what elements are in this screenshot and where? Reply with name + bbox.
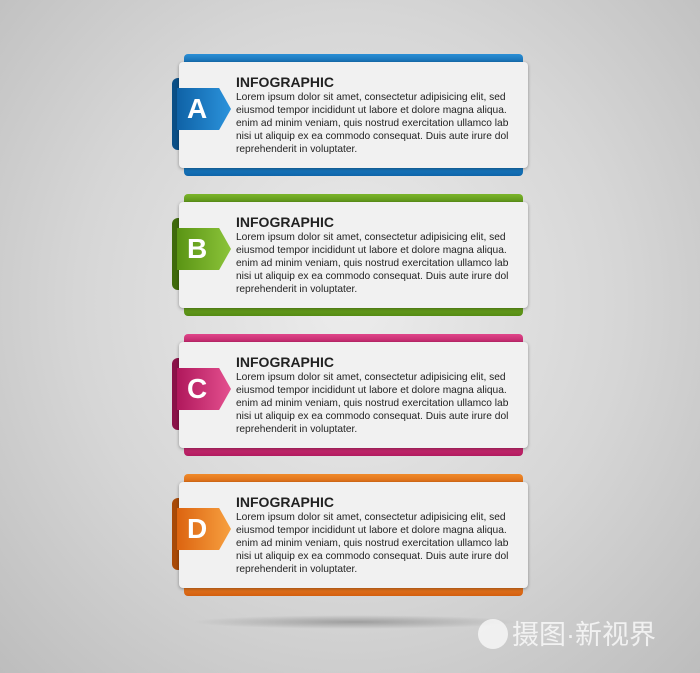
text: reprehenderit in voluptater. — [236, 284, 357, 295]
text: eiusmod tempor incididunt ut labore et dolore magna aliqua. — [236, 245, 507, 256]
text: enim ad minim veniam, quis nostrud exercitation ullamco lab — [236, 398, 508, 409]
text: enim ad minim veniam, quis nostrud exercitation ullamco lab — [236, 538, 508, 549]
heading: INFOGRAPHIC — [236, 74, 334, 90]
text: eiusmod tempor incididunt ut labore et dolore magna aliqua. — [236, 385, 507, 396]
tag: A — [177, 88, 231, 130]
text: Lorem ipsum dolor sit amet, consectetur adipisicing elit, sed — [236, 232, 506, 243]
tag: C — [177, 368, 231, 410]
text: Lorem ipsum dolor sit amet, consectetur adipisicing elit, sed — [236, 372, 506, 383]
text — [236, 92, 508, 155]
text: Lorem ipsum dolor sit amet, consectetur adipisicing elit, sed — [236, 92, 506, 103]
text — [236, 372, 508, 435]
heading: INFOGRAPHIC — [236, 214, 334, 230]
text: nisi ut aliquip ex ea commodo consequat. Duis aute irure dol — [236, 411, 508, 422]
tag: D: D — [187, 513, 207, 544]
text: reprehenderit in voluptater. — [236, 144, 357, 155]
text: eiusmod tempor incididunt ut labore et dolore magna aliqua. — [236, 105, 507, 116]
text — [236, 232, 508, 295]
tag: D — [177, 508, 231, 550]
text: nisi ut aliquip ex ea commodo consequat. Duis aute irure dol — [236, 271, 508, 282]
text: reprehenderit in voluptater. — [236, 564, 357, 575]
text — [236, 512, 508, 575]
heading: INFOGRAPHIC — [236, 494, 334, 510]
tag: A: A — [187, 93, 207, 124]
heading: INFOGRAPHIC — [236, 354, 334, 370]
panel: C — [172, 334, 530, 456]
watermark: 摄图·新视界 — [512, 620, 656, 650]
panel: A — [172, 54, 530, 176]
panel: D — [172, 474, 530, 596]
text: eiusmod tempor incididunt ut labore et dolore magna aliqua. — [236, 525, 507, 536]
text: nisi ut aliquip ex ea commodo consequat. Duis aute irure dol — [236, 131, 508, 142]
tag: B: B — [187, 233, 207, 264]
text: enim ad minim veniam, quis nostrud exercitation ullamco lab — [236, 258, 508, 269]
text: Lorem ipsum dolor sit amet, consectetur adipisicing elit, sed — [236, 512, 506, 523]
panel: B — [172, 194, 530, 316]
shadow — [190, 615, 520, 629]
text: reprehenderit in voluptater. — [236, 424, 357, 435]
tag: B — [177, 228, 231, 270]
text: nisi ut aliquip ex ea commodo consequat. Duis aute irure dol — [236, 551, 508, 562]
text: enim ad minim veniam, quis nostrud exercitation ullamco lab — [236, 118, 508, 129]
tag: C: C — [187, 373, 207, 404]
